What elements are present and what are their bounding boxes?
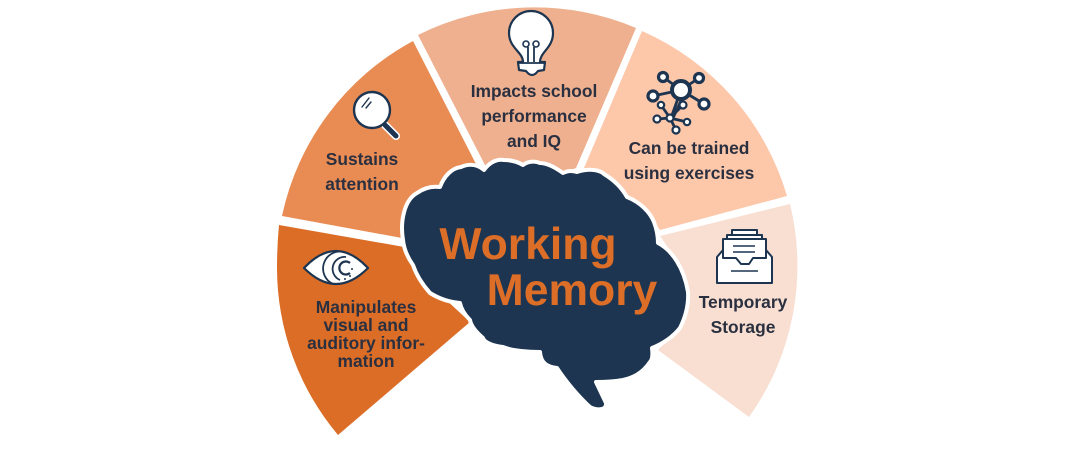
label: temporary storage: Storage bbox=[711, 317, 776, 337]
panel: sustains attention bbox=[282, 41, 476, 238]
label: manipulates: auditory infor- bbox=[307, 333, 425, 353]
brain bbox=[402, 160, 688, 409]
icon: file tray bbox=[717, 230, 772, 283]
title: working memory: Memory bbox=[487, 266, 658, 315]
label: can be trained using exercises: Can be trained bbox=[629, 138, 749, 158]
label: manipulates: visual and bbox=[323, 315, 409, 335]
label: impacts school performance and IQ: performance bbox=[481, 106, 587, 126]
label: manipulates: mation bbox=[337, 351, 395, 371]
panel: impacts school performance and IQ bbox=[418, 7, 636, 173]
panel: temporary storage bbox=[658, 204, 797, 417]
icon: light bulb bbox=[509, 11, 553, 75]
title: working memory: Working bbox=[439, 220, 617, 269]
icon: eye bbox=[304, 251, 368, 284]
label: sustains attention: Sustains bbox=[326, 149, 398, 169]
panel: manipulates visual and auditory information bbox=[277, 225, 470, 435]
label: can be trained using exercises: using exercises bbox=[624, 163, 754, 183]
icon: magnifying glass bbox=[354, 92, 396, 136]
label: impacts school performance and IQ: Impacts school bbox=[471, 81, 597, 101]
label: sustains attention: attention bbox=[325, 174, 399, 194]
label: manipulates: Manipulates bbox=[316, 297, 416, 317]
label: impacts school performance and IQ: and IQ bbox=[507, 131, 561, 151]
icon: network bbox=[648, 72, 709, 134]
label: temporary storage: Temporary bbox=[699, 292, 788, 312]
panel: can be trained using exercises bbox=[584, 31, 787, 230]
